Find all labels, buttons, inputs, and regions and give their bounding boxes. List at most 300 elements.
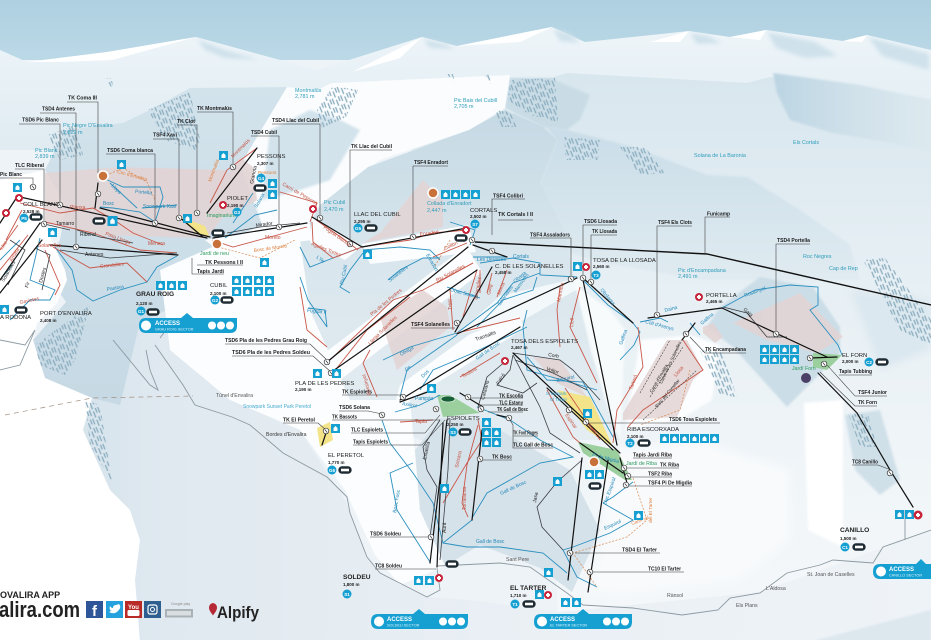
piste names: red: Tròlil bbox=[448, 299, 454, 310]
sector badge codes: T3 bbox=[593, 273, 599, 278]
village and place names: Rànsol bbox=[667, 593, 683, 599]
piste names: red: Grandalles bbox=[100, 261, 125, 270]
lift names: TK Clot bbox=[177, 119, 195, 125]
piste names: blue: Daina bbox=[664, 305, 678, 314]
piste names: red: Llosa bbox=[673, 365, 685, 378]
background: right-hand mountain surface bbox=[510, 73, 931, 642]
piste names: blue: Coll d'Arenys bbox=[644, 319, 675, 333]
piste names: blue: Riu Cubil bbox=[339, 264, 349, 285]
lift names: TSF4 Assaladors bbox=[530, 232, 570, 238]
access banner: Canillo bbox=[873, 559, 931, 579]
background: Cubil and Pla white area bbox=[160, 225, 445, 585]
resort area names and altitudes: PIOLET bbox=[227, 196, 248, 202]
lift names: TC8 Canillo bbox=[852, 460, 878, 466]
access banner: Soldeu: ACCESS bbox=[387, 617, 412, 623]
piste names: blue: Ós bbox=[403, 364, 413, 373]
piste names: red: Gaviotes bbox=[19, 296, 40, 306]
background: sky bbox=[0, 0, 931, 90]
lift names: TK Font Roges bbox=[513, 430, 538, 436]
piste names: blue: Esquirol bbox=[603, 519, 622, 532]
mountain peak names: Collada d'Enradort bbox=[427, 201, 472, 207]
piste names: black and grey: Mirador bbox=[255, 221, 273, 229]
piste names: blue: Pastora bbox=[106, 284, 125, 293]
resort area names and altitudes: EL TARTER bbox=[510, 585, 547, 592]
village and place names: L'Aldosa bbox=[766, 586, 786, 592]
itinerary and beginner names: Camí ral bbox=[631, 515, 650, 527]
lift names: TSD6 Pic Blanc bbox=[22, 118, 59, 124]
background: left white snowfield bbox=[0, 170, 140, 642]
icon: instagram bbox=[144, 601, 161, 618]
lift names: TK Llosada bbox=[592, 229, 618, 235]
itinerary and beginner names: Imaginarium bbox=[207, 213, 236, 219]
lift names: TSF4 Pi De Migdia bbox=[648, 480, 693, 486]
piste names: blue: Obaga bbox=[399, 345, 415, 358]
piste names: red: Montmalús bbox=[230, 138, 252, 159]
resort area names and altitudes: CANILLO bbox=[840, 527, 869, 534]
lift names: TSD6 Pla de les Pedres Grau Roig bbox=[225, 338, 308, 344]
mountain peak names: 2,447 m bbox=[427, 208, 447, 214]
sector badges bbox=[20, 174, 874, 608]
mountain peak names: 2,491 m bbox=[678, 274, 698, 280]
piste names: black and grey: Estallilla bbox=[422, 441, 432, 460]
piste names: blue: Rosamyol bbox=[744, 286, 767, 299]
piste names: black and grey: Falcó bbox=[496, 372, 507, 386]
piste names: red: Gaig bbox=[486, 284, 494, 295]
dark dashed couloirs bbox=[640, 340, 697, 420]
piste names: blue: Enradort bbox=[424, 253, 439, 273]
website address: alira.com bbox=[0, 597, 80, 622]
access banner: Soldeu bbox=[371, 609, 468, 629]
piste names: red: Llarga Solanelles bbox=[367, 315, 399, 346]
itinerary and beginner names bbox=[116, 158, 816, 527]
resort area names and altitudes: CORTALS bbox=[470, 208, 497, 214]
background: rock face shade bbox=[505, 78, 590, 130]
resort area names and altitudes: TOSA DE LA LLOSADA bbox=[593, 258, 656, 264]
icon: facebook: f bbox=[92, 603, 98, 620]
sector badge codes: G2 bbox=[212, 298, 219, 303]
off-piste zones in pink bbox=[45, 157, 843, 420]
wifi markers bbox=[14, 184, 889, 608]
piste names: red: Camí de Pessons bbox=[281, 182, 319, 207]
Alpify logo: Alpify bbox=[217, 603, 259, 622]
itinerary and beginner names: Snowpark bbox=[546, 391, 567, 396]
background: lower valley bbox=[30, 300, 931, 642]
piste names: red: Lloll bbox=[569, 318, 576, 327]
itinerary and beginner names: Bosc de Moretó bbox=[253, 243, 288, 254]
snow park mascots bbox=[98, 171, 811, 467]
itinerary and beginner names: Pi de Migdia bbox=[591, 452, 620, 465]
mountain peak names: Pic d'Encampadana bbox=[678, 268, 726, 274]
resort area names and altitudes: SOLDEU bbox=[343, 574, 371, 581]
resort area names and altitudes: 1,770 m bbox=[328, 460, 345, 465]
bottom edge strip bbox=[0, 640, 931, 642]
resort area names and altitudes: 2,528 m bbox=[23, 209, 40, 214]
piste names: blue: Marmotes bbox=[513, 272, 531, 294]
lift names: TLC Estany bbox=[499, 400, 524, 406]
piste names: blue: Gall de Bosc bbox=[499, 479, 528, 497]
access banner: Canillo: CANILLO SECTOR bbox=[889, 574, 922, 578]
lift names: TSF4 Colibri bbox=[493, 194, 523, 200]
piste names: blue: Bosc bbox=[103, 201, 115, 207]
background: right valley bottom shade bbox=[810, 610, 931, 642]
piste names: black and grey: Voltor bbox=[545, 366, 560, 376]
lift names: TSD6 Solana bbox=[339, 405, 371, 411]
piste names: red: Arriata bbox=[9, 247, 21, 263]
lift names: Tapis Jardi Riba bbox=[633, 452, 673, 458]
resort area names and altitudes: C. DE LES SOLANELLES bbox=[495, 264, 563, 270]
itinerary and beginner names: Montmalús bbox=[207, 158, 221, 183]
access banner: El Tarter: EL TARTER SECTOR bbox=[550, 624, 587, 628]
piste names: red: Maritxó bbox=[585, 422, 601, 439]
piste names: blue: Portella bbox=[135, 189, 152, 196]
mountain peak names: Roc Negres bbox=[803, 254, 832, 260]
background: blue slope under Solana de la Baronia bbox=[510, 85, 860, 280]
piste names: red: Solanelles bbox=[38, 243, 62, 249]
sector badge codes bbox=[21, 176, 872, 607]
itinerary and beginner names: del El Tarter bbox=[648, 497, 654, 523]
background: left massif and Grau Roig basin bbox=[33, 87, 287, 405]
sector badge codes: T2 bbox=[627, 441, 633, 446]
lift names bbox=[0, 96, 888, 572]
piste names: red: Enradort bbox=[419, 229, 440, 238]
resort area names and altitudes: EL PERETOL bbox=[328, 453, 365, 459]
background: Pessons blue patch bbox=[262, 110, 360, 200]
piste names: blue: Gall de Bosc bbox=[475, 340, 502, 362]
resort area names and altitudes: PORT D'ENVALIRA bbox=[40, 311, 92, 317]
lift names: TK Encampadana bbox=[705, 347, 747, 353]
piste names: red: Transaltis bbox=[475, 330, 497, 343]
mountain peak names: 2,839 m bbox=[35, 154, 55, 160]
village and place names: Els Plans bbox=[736, 603, 758, 609]
resort area names and altitudes: LLAC DEL CUBIL bbox=[354, 212, 401, 218]
itinerary and beginner names: Circ d'Envalira bbox=[116, 169, 148, 183]
lift names: Funicamp bbox=[707, 212, 731, 218]
itinerary and beginner names: El Tarter bbox=[550, 397, 567, 402]
lift names: TK Riba bbox=[660, 462, 680, 468]
resort area names and altitudes: 2,465 m bbox=[706, 299, 723, 304]
sector badge codes: G1 bbox=[138, 309, 145, 314]
piste names: red: Marmots bbox=[556, 282, 566, 302]
background: white slope Portella bbox=[625, 335, 720, 430]
resort area names and altitudes: 2,502 m bbox=[470, 214, 487, 219]
lift names: TK Espiolets bbox=[342, 390, 372, 396]
resort area names and altitudes: GRAU ROIG bbox=[136, 291, 174, 298]
piste names: black and grey: Antenes bbox=[85, 252, 104, 258]
lift names: TK Cortals I II bbox=[498, 212, 533, 218]
background: right blue edge bbox=[850, 290, 931, 370]
blue pistes bbox=[0, 178, 842, 587]
lift names: TK El Peretol bbox=[283, 418, 315, 424]
lift names: TSD4 Cubil bbox=[251, 130, 277, 136]
resort area names and altitudes: 2,307 m bbox=[257, 161, 274, 166]
icon: facebook bbox=[86, 601, 103, 620]
lift names: TSF2 Riba bbox=[648, 472, 673, 478]
resort area names and altitudes: 2,408 m bbox=[40, 318, 57, 323]
lift names: TK Coma III bbox=[68, 96, 97, 102]
background: right valley white field bbox=[590, 440, 790, 595]
piste names: blue: Obslanta bbox=[598, 287, 616, 307]
piste names: black and grey: Riberal bbox=[80, 232, 96, 238]
piste names: blue: L'Ile bbox=[315, 255, 326, 265]
piste names: black and grey: Gaig bbox=[742, 307, 754, 318]
piste names: black and grey: Corb bbox=[548, 352, 560, 360]
piste names: red: Solanelles bbox=[473, 276, 483, 300]
lift names: Pic Blanc bbox=[0, 172, 22, 178]
lift names: TSD4 El Tarter bbox=[622, 548, 658, 554]
resort area names and altitudes: COLL BLANC bbox=[23, 202, 60, 208]
piste names: black and grey: Canal d'Envalira bbox=[649, 363, 669, 394]
mountain peak names: 2,705 m bbox=[454, 104, 474, 110]
piste names: red: Marta bbox=[496, 281, 507, 296]
resort area names and altitudes: 2,100 m bbox=[627, 434, 644, 439]
piste names: blue: Esquirol bbox=[556, 374, 575, 384]
resort area names and altitudes: PORTELLA bbox=[706, 293, 737, 299]
itinerary and beginner names: Jardí de Riba bbox=[626, 461, 657, 467]
piste names: black and grey: Solanelles bbox=[1, 260, 18, 283]
piste names: blue: Gallina bbox=[699, 312, 715, 327]
lift names: TK Llac del Cubil bbox=[351, 144, 392, 150]
itinerary dashed routes bbox=[100, 168, 690, 587]
lift names: TSF4 Xavi bbox=[153, 132, 177, 138]
itinerary and beginner names: Jardí Forn bbox=[792, 366, 816, 372]
resort area names and altitudes: ESPIOLETS bbox=[447, 416, 480, 422]
piste names: red: Moreto bbox=[265, 235, 281, 241]
resort area names and altitudes: 2,100 m bbox=[210, 291, 227, 296]
store badges bbox=[165, 602, 193, 618]
piste names: red: Torrallarsa bbox=[462, 486, 468, 510]
mountain peak names: Solana de La Baronia bbox=[694, 153, 746, 159]
lift names: TLC Riberal bbox=[15, 163, 44, 169]
access banner: Grau Roig bbox=[139, 313, 237, 333]
itinerary and beginner names: Snowpark Sunset Park Peretol bbox=[243, 404, 311, 410]
piste names: red bbox=[0, 138, 685, 510]
mountain peak names: Cap de Rep bbox=[829, 266, 858, 272]
resort area names and altitudes: PLA DE LES PEDRES bbox=[295, 381, 354, 387]
background: Canillo slope shade bbox=[845, 410, 900, 495]
access banner: El Tarter bbox=[534, 609, 632, 629]
lift names: TSD4 Portella bbox=[777, 238, 811, 244]
piste names: red: Fugida Blanca bbox=[322, 225, 352, 248]
sector badge codes: S1 bbox=[344, 592, 350, 597]
lift names: TK Escolla bbox=[499, 394, 524, 400]
mountain peak names: Els Cortals bbox=[793, 140, 819, 146]
resort area names and altitudes: A RODONA bbox=[0, 315, 31, 321]
lift names: TSD6 Tosa Espiolets bbox=[669, 417, 717, 423]
red first aid crosses bbox=[2, 194, 922, 599]
piste names: blue: Axiliroi bbox=[402, 401, 417, 410]
sector badge codes: G5 bbox=[355, 226, 362, 231]
piste names: red: Espinar bbox=[563, 413, 578, 430]
lift names: TK Bassots bbox=[332, 414, 357, 420]
piste names: red: Solsara bbox=[454, 450, 464, 468]
access banner: El Tarter: ACCESS bbox=[550, 617, 575, 623]
piste names: blue: Dos bbox=[420, 369, 431, 379]
lift names: TK Montmalús bbox=[197, 106, 232, 112]
ski lifts bbox=[0, 148, 913, 592]
village and place names: St. Joan de Caselles bbox=[807, 572, 855, 578]
village and place names: Sant Pere bbox=[506, 557, 529, 563]
sector badge codes: C1 bbox=[842, 545, 848, 550]
piste names: black and grey: Aunt bbox=[442, 522, 448, 533]
background: white slopes right of Tosa bbox=[575, 285, 625, 440]
sector badge codes: S3 bbox=[450, 430, 456, 435]
piste names: red: Tapia bbox=[415, 419, 427, 425]
lift names: TSF4 Els Clots bbox=[658, 220, 692, 226]
sector badge codes: P5 bbox=[21, 216, 27, 221]
sector badge codes: G4 bbox=[258, 176, 265, 181]
resort area names and altitudes: 1,500 m bbox=[840, 536, 857, 541]
piste names: red: Tarteró bbox=[628, 374, 639, 391]
piste names: blue: Cortals bbox=[513, 254, 529, 260]
funicamp cable car bbox=[475, 242, 931, 305]
background: right facet under Els Cortals bbox=[773, 73, 931, 150]
resort area names and altitudes: EL FORN bbox=[842, 353, 867, 359]
lift names: TSF4 Junior bbox=[858, 390, 888, 396]
resort area names and altitudes: PESSONS bbox=[257, 154, 286, 160]
lift names: TLC Espiolets bbox=[351, 428, 383, 434]
background: white ski runs centre bbox=[205, 218, 585, 408]
background: white slopes near Canillo bbox=[804, 400, 843, 547]
lift names: TK Forn bbox=[858, 400, 878, 406]
lift names: TSD4 Llac del Cubil bbox=[272, 118, 319, 124]
piste names: blue bbox=[103, 183, 767, 545]
resort area names and altitudes: 2,467 m bbox=[511, 345, 528, 350]
piste names: blue: Pampàs bbox=[415, 396, 434, 402]
piste names: red: Pla de les Pedres bbox=[369, 287, 404, 318]
itinerary and beginner names: Jardí de neu bbox=[200, 251, 229, 257]
lift names: TSD6 Coma blanca bbox=[107, 148, 154, 154]
lift names: TSF4 Enradort bbox=[414, 160, 448, 166]
village and place names: Bordes d'Envalira bbox=[266, 432, 307, 438]
piste names: blue: Fugida II bbox=[307, 308, 327, 316]
piste names: black and grey bbox=[1, 165, 754, 533]
village and place names bbox=[216, 393, 855, 609]
lift stations bbox=[30, 164, 893, 575]
background: central blue slope bbox=[300, 110, 620, 440]
icon: youtube bbox=[125, 601, 142, 618]
piste names: blue: Solanelles bbox=[388, 264, 410, 284]
piste names: black and grey: Catalans bbox=[480, 379, 491, 401]
border line bbox=[5, 396, 193, 415]
piste names: blue: Solana bbox=[254, 192, 267, 209]
icon: twitter bbox=[106, 601, 123, 618]
yellow snowpark zones bbox=[178, 216, 613, 447]
piste names: blue: Snowpark Xavi bbox=[143, 204, 176, 210]
piste names: black and grey: Canal de les Solanelles bbox=[658, 340, 683, 384]
piste names: red: Agulles Tortes bbox=[310, 241, 342, 259]
lift names: TK Gall de Bosc bbox=[497, 407, 528, 413]
piste names: red: Menera bbox=[148, 241, 165, 247]
resort area names and altitudes: 2,120 m bbox=[136, 301, 153, 306]
resort area names and altitudes: CUBIL bbox=[210, 283, 228, 289]
lift names: Tapis Jardi bbox=[197, 269, 224, 275]
lift names: Tapis Tubbing bbox=[839, 369, 873, 375]
access banner: Grau Roig: GRAU ROIG SECTOR bbox=[155, 328, 194, 332]
resort area names and altitudes: RIBA ESCORXADA bbox=[627, 427, 679, 433]
red pistes bbox=[0, 148, 703, 517]
piste names: blue: Les Deveses bbox=[477, 257, 506, 263]
mountain peak names bbox=[35, 88, 858, 280]
village and place names: Túnel d'Envalira bbox=[216, 393, 253, 399]
lift names: TSD6 Soldeu bbox=[370, 532, 402, 538]
piste names: black and grey: Tamarro bbox=[56, 221, 75, 227]
lift names: TC8 Soldeu bbox=[375, 564, 403, 570]
resort area names and altitudes: 2,560 m bbox=[593, 264, 610, 269]
piste names: red: Riu Solanelles bbox=[435, 263, 467, 284]
mountain peak names: Pic Blanc bbox=[35, 148, 58, 154]
piste names: black and grey: Dostes bbox=[38, 266, 48, 284]
mountain peak names: Montmalús bbox=[295, 88, 322, 94]
mountain peak names: 2,822 m bbox=[63, 130, 83, 136]
resort area names and altitudes: 2,458 m bbox=[495, 270, 512, 275]
piste names: red: Colibrí bbox=[443, 240, 459, 252]
piste names: red: Teulera bbox=[461, 366, 478, 380]
resort area names and altitudes: TOSA DELS ESPIOLETS bbox=[511, 339, 578, 345]
piste names: blue: Llops bbox=[110, 183, 123, 196]
piste names: blue: Obaga bbox=[512, 270, 528, 285]
mountain peak names: Pic Negre D'Envalira bbox=[63, 123, 113, 129]
background: white slope under Montmalús bbox=[245, 75, 510, 240]
lift names: TSD6 Llosada bbox=[584, 219, 618, 225]
piste names: blue: Solanelles bbox=[497, 284, 515, 307]
piste names: red: Pista Llarga bbox=[104, 231, 131, 246]
sector badge codes: G3 bbox=[234, 210, 241, 215]
piste names: black and grey: Bosc del Comellar bbox=[654, 378, 681, 409]
piste names: blue: Gall de Bosc bbox=[476, 539, 505, 545]
green beginner zones bbox=[437, 353, 842, 480]
access banner: Soldeu: SOLDEU SECTOR bbox=[387, 624, 420, 628]
piste names: black and grey: Fir bbox=[24, 281, 32, 289]
sector badge codes: G6 bbox=[329, 468, 336, 473]
background: far mountain ridge bbox=[0, 27, 931, 150]
piste names: red: Rossinyol bbox=[362, 374, 373, 396]
lift names: Tapis Espiolets bbox=[353, 440, 388, 446]
background: Portella basin bbox=[707, 277, 840, 407]
rock hatching patches bbox=[35, 74, 931, 482]
resort area names and altitudes: 1,710 m bbox=[510, 593, 527, 598]
mountain peak names: 2,781 m bbox=[295, 94, 315, 100]
app heading: OVALIRA APP bbox=[0, 590, 60, 600]
resort area names and altitudes: 2,250 m bbox=[447, 422, 464, 427]
piste names: blue: Llac Esquirol bbox=[602, 477, 618, 506]
service icons: blue squares bbox=[0, 151, 914, 607]
sector badge codes: C2 bbox=[866, 360, 872, 365]
lift names: TLC Gall de Bosc bbox=[513, 442, 553, 448]
resort area names and altitudes bbox=[0, 154, 869, 598]
resort area names and altitudes: 2,000 m bbox=[842, 359, 859, 364]
resort area names and altitudes: 2,190 m bbox=[295, 387, 312, 392]
lift names: TSF4 Solanelles bbox=[411, 322, 450, 328]
lift names: TK Pessons I II bbox=[205, 260, 243, 266]
piste names: black and grey: Jasa bbox=[532, 492, 540, 503]
sector badge codes: T1 bbox=[512, 602, 518, 607]
mountain peak names: Pic Cubil bbox=[324, 200, 345, 206]
piste names: black and grey: Granota bbox=[249, 165, 259, 184]
piste names: blue: Gallina bbox=[618, 329, 629, 346]
resort area names and altitudes: 2,295 m bbox=[354, 219, 371, 224]
resort area names and altitudes: 2,190 m bbox=[227, 203, 244, 208]
roads bbox=[0, 322, 931, 615]
piste names: blue: Obac Solana bbox=[449, 287, 479, 300]
access banner: Canillo: ACCESS bbox=[889, 567, 914, 573]
resort area names and altitudes: 1,800 m bbox=[343, 582, 360, 587]
lift names: TSD6 Pla de les Pedres Soldeu bbox=[232, 350, 311, 356]
mountain peak names: 2,470 m bbox=[324, 207, 344, 213]
access banner: Grau Roig: ACCESS bbox=[155, 321, 180, 327]
lift names: TK Bosc bbox=[492, 454, 512, 460]
mountain peak names: Pic Baix del Cubill bbox=[454, 98, 497, 104]
icon: youtube: You bbox=[128, 605, 139, 611]
